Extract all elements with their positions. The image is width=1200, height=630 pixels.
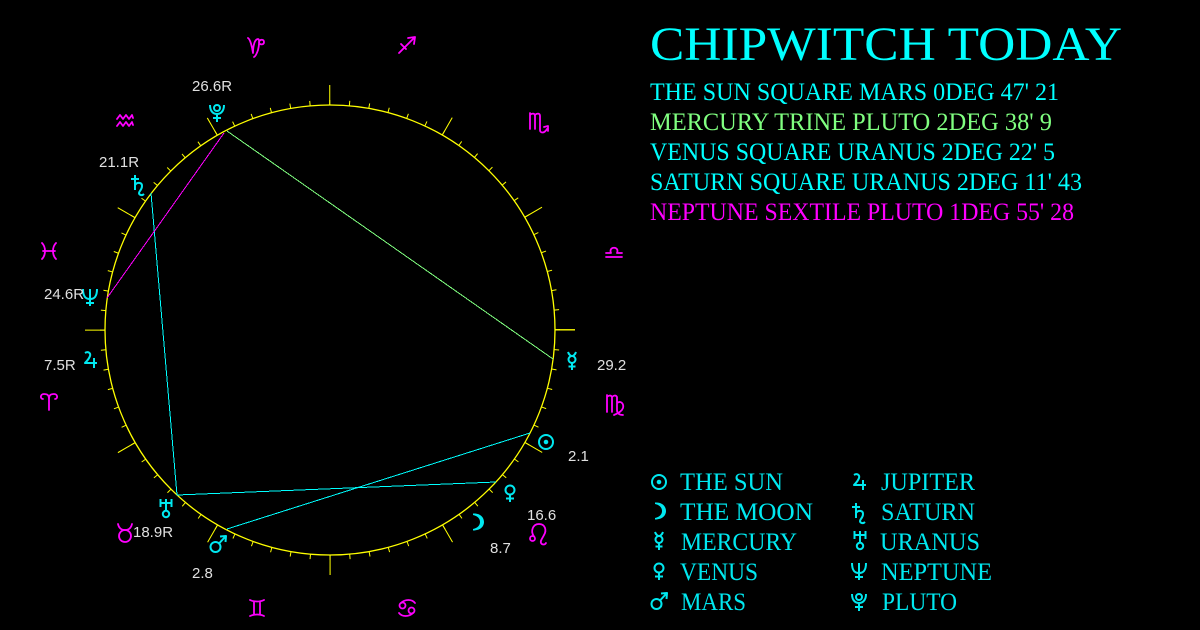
aspect line: mercury trine pluto	[227, 131, 553, 359]
title: CHIPWITCH TODAY	[650, 18, 1122, 71]
icon: jupiter	[85, 352, 97, 368]
aspect list: SATURN SQUARE URANUS 2DEG 11' 43	[650, 169, 1082, 196]
icon: leo	[530, 524, 546, 544]
icon: pisces	[42, 243, 56, 259]
aspect line: sun square mars	[227, 433, 530, 529]
zodiac signs	[41, 37, 623, 616]
planet degree labels: 8.7	[490, 540, 511, 557]
aspect list: THE SUN SQUARE MARS 0DEG 47' 21	[650, 79, 1059, 106]
icon: venus	[654, 564, 664, 580]
planet degree labels: 26.6R	[192, 78, 232, 95]
icon: taurus	[118, 524, 132, 542]
planet legend	[652, 469, 992, 616]
icon: venus	[506, 486, 514, 502]
aspect list: MERCURY TRINE PLUTO 2DEG 38' 9	[650, 109, 1052, 136]
icon: sun	[539, 435, 553, 449]
degree tick marks	[95, 95, 565, 565]
aspect line: neptune sextile pluto	[107, 133, 224, 298]
legend names: URANUS	[880, 529, 980, 556]
icon: aquarius	[117, 115, 133, 126]
legend names: MERCURY	[681, 529, 797, 556]
legend names	[680, 469, 992, 616]
zodiac wheel chart	[41, 37, 626, 616]
aspect line: saturn square uranus	[151, 193, 177, 495]
icon: uranus	[160, 499, 172, 517]
icon: jupiter	[854, 474, 866, 490]
legend names: SATURN	[881, 499, 975, 526]
icon: capricorn	[248, 38, 264, 57]
aspect list: VENUS SQUARE URANUS 2DEG 22' 5	[650, 139, 1055, 166]
legend names: VENUS	[680, 559, 758, 586]
icon: mercury	[568, 352, 576, 370]
icon: mercury	[655, 532, 663, 550]
planet glyphs on wheel	[83, 105, 576, 552]
legend names: MARS	[681, 589, 746, 616]
icon: mars	[652, 593, 667, 609]
icon: sun	[652, 475, 666, 489]
aspect list	[650, 79, 1082, 226]
icon: neptune	[83, 289, 97, 306]
legend glyphs	[652, 474, 866, 611]
icon: saturn	[131, 175, 144, 195]
icon: moon	[473, 513, 484, 530]
icon: pluto	[852, 594, 866, 611]
icon: libra	[606, 248, 622, 257]
legend names: THE SUN	[680, 469, 783, 496]
icon: uranus	[854, 531, 866, 549]
planet degree labels: 2.8	[192, 565, 213, 582]
planet degree labels: 2.1	[568, 448, 589, 465]
icon: saturn	[852, 503, 865, 523]
legend names: NEPTUNE	[881, 559, 992, 586]
icon: mars	[210, 536, 226, 552]
icon: pluto	[210, 105, 224, 122]
planet degree labels: 21.1R	[99, 154, 139, 171]
planet degree labels: 18.9R	[133, 524, 173, 541]
planet degree labels: 29.2	[597, 357, 626, 374]
aspect line: venus square uranus	[177, 482, 496, 495]
icon: cancer	[399, 600, 415, 616]
icon: neptune	[852, 563, 866, 580]
planet degree labels: 7.5R	[44, 357, 76, 374]
icon: aries	[41, 394, 57, 410]
wheel circle	[105, 105, 555, 555]
icon: scorpio	[530, 113, 548, 132]
planet degree labels: 16.6	[527, 507, 556, 524]
icon: moon	[655, 502, 666, 520]
icon: sagittarius	[399, 37, 415, 53]
icon: gemini	[250, 600, 264, 616]
planet degree labels: 24.6R	[44, 286, 84, 303]
planet degree labels	[44, 78, 626, 582]
legend names: PLUTO	[882, 589, 957, 616]
legend names: JUPITER	[881, 469, 975, 496]
icon: virgo	[607, 395, 623, 415]
legend names: THE MOON	[680, 499, 813, 526]
aspect list: NEPTUNE SEXTILE PLUTO 1DEG 55' 28	[650, 199, 1074, 226]
